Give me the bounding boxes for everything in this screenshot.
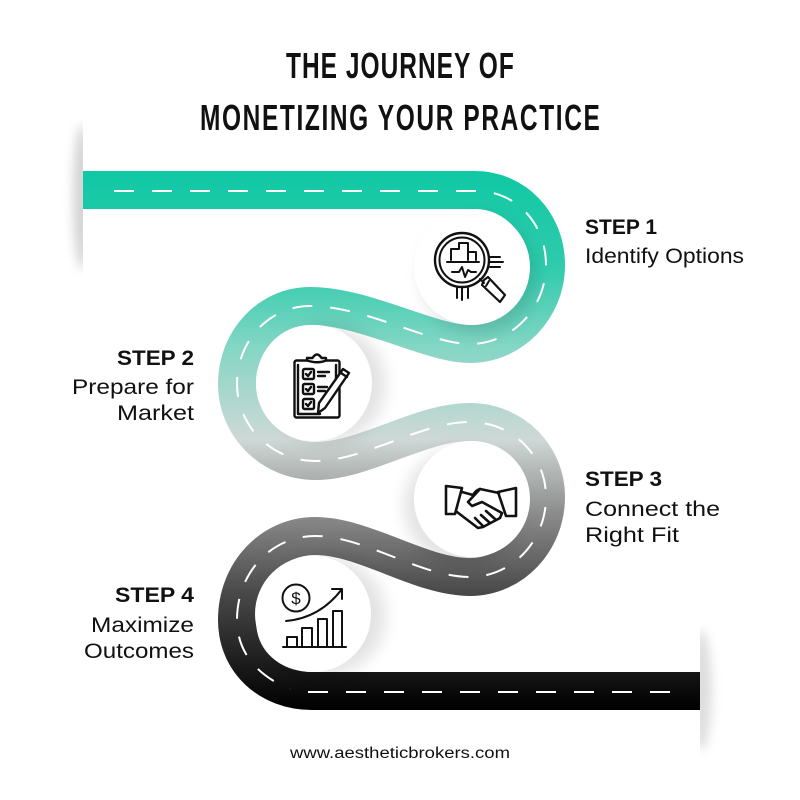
step 4 label: Maximize	[91, 614, 194, 637]
icon: magnifier with chart	[435, 233, 505, 302]
step 2 label	[72, 347, 194, 425]
step 1 label: STEP 1	[585, 216, 657, 239]
title: THE JOURNEY OF	[286, 45, 514, 86]
step 1 label: Identify Options	[585, 245, 744, 268]
step 3 label	[585, 468, 720, 547]
title	[200, 45, 600, 138]
icon: growth chart with dollar: $	[291, 589, 301, 608]
disc shadows	[270, 218, 536, 674]
step 4 label: STEP 4	[115, 584, 194, 607]
title: MONETIZING YOUR PRACTICE	[200, 97, 600, 138]
step 2 label: STEP 2	[117, 347, 194, 370]
icon: clipboard checklist	[294, 354, 349, 418]
step 4 label	[84, 584, 194, 663]
website url: www.aestheticbrokers.com	[289, 745, 510, 762]
icon discs	[255, 209, 530, 672]
step 3 label: Connect the	[585, 498, 720, 521]
step 4 label: Outcomes	[84, 640, 194, 663]
step 2 label: Market	[117, 402, 194, 425]
step 2 label: Prepare for	[72, 376, 194, 399]
icon: growth chart with dollar	[282, 584, 346, 647]
icon: handshake	[446, 486, 516, 528]
step 3 label: STEP 3	[585, 468, 662, 491]
road lane dashes	[114, 191, 672, 692]
winding road	[83, 190, 700, 691]
step 1 label	[585, 216, 744, 268]
road end shadows	[73, 105, 712, 770]
step 3 label: Right Fit	[585, 524, 679, 547]
